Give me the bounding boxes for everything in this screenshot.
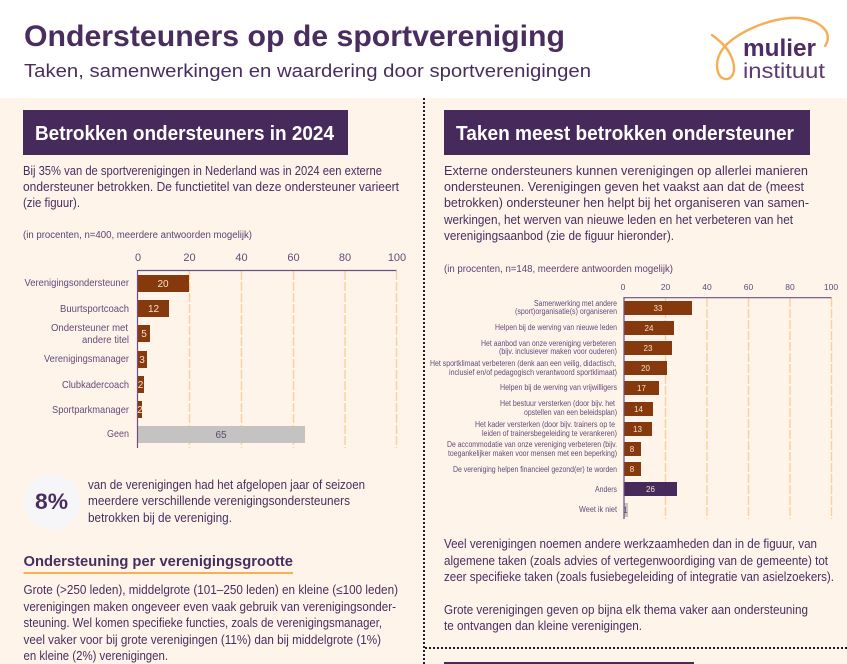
bar chart: taken (430, 282, 838, 519)
bar chart: taken: 0 (621, 282, 626, 292)
bar chart: taken: 24 (645, 324, 654, 333)
bar chart: functietitels (24, 252, 406, 448)
intro text: Bij 35% van de sportverenigingen in Nederland was in 2024 een externe (23, 164, 382, 178)
bar chart: taken: 33 (654, 304, 663, 313)
bar chart: functietitels: Verenigingsondersteuner (24, 277, 129, 289)
bar chart: functietitels: 3 (139, 355, 145, 366)
bar chart: taken: 1 (623, 506, 628, 515)
bar chart: taken: 8 (630, 465, 635, 474)
bar chart: functietitels: 40 (235, 252, 248, 264)
heading: betrokken ondersteuners (23, 110, 348, 155)
bar chart: functietitels: 100 (388, 252, 406, 264)
bar chart: taken: opstellen van een beleidsplan) (524, 408, 617, 417)
bar chart: functietitels: 2 (137, 405, 143, 416)
bar chart: taken: De vereniging helpen financieel gezond(er) te worden (453, 465, 617, 474)
bar chart: taken: Het bestuur versterken (door bijv. het (500, 399, 616, 408)
bar chart: functietitels: andere titel (82, 334, 129, 346)
chart caption: (in procenten, n=400, meerdere antwoorden mogelijk) (23, 230, 252, 241)
bar chart: taken: 8 (630, 445, 635, 454)
text block: grote verenigingen: Grote verenigingen geven op bijna elk thema vaker aan ondersteuning (444, 603, 808, 617)
bar chart: taken: Samenwerking met andere (534, 299, 617, 308)
bar chart: taken: 17 (637, 384, 646, 393)
bar chart: taken: 100 (824, 282, 838, 292)
text block: andere werkzaamheden (444, 537, 834, 584)
bar chart: functietitels: Buurtsportcoach (60, 303, 129, 315)
bar chart: taken: 26 (646, 485, 655, 494)
bar chart: functietitels: Verenigingsmanager (44, 353, 129, 365)
bar chart: taken: Helpen bij de werving van nieuwe leden (495, 323, 617, 332)
bar chart: functietitels: 65 (215, 430, 227, 441)
bar chart: taken: 20 (661, 282, 670, 292)
bar chart: taken: inclusief en/of pedagogisch verantwoord sportklimaat) (449, 368, 617, 377)
bar chart: taken: Het sportklimaat verbeteren (denk aan een veilig, didactisch, (430, 359, 616, 368)
heading: taken: Taken meest betrokken ondersteuner (456, 123, 794, 145)
bar chart: taken: (sport)organisatie(s) organiseren (515, 307, 617, 316)
text block: grote verenigingen (444, 603, 808, 633)
heading: taken (444, 110, 810, 155)
text block: verenigingsgrootte (24, 583, 398, 663)
bar chart: taken: 14 (634, 405, 643, 414)
text block: verenigingsgrootte: Grote (>250 leden), middelgrote (101–250 leden) en kleine (≤100 leden) (24, 583, 398, 597)
bar chart: functietitels: Ondersteuner met (51, 322, 128, 334)
intro text: ondersteuner betrokken. De functietitel van deze ondersteuner varieert (23, 180, 399, 194)
intro text: (zie figuur). (23, 196, 80, 210)
intro text: werkingen, het werven van nieuwe leden en het verbeteren van het (443, 213, 793, 227)
subtitle: Taken, samenwerkingen en waardering door sportverenigingen (24, 61, 591, 81)
intro text: verenigingsaanbod (zie de figuur hieronder). (444, 229, 674, 243)
logo: Mulier Instituut: mulier (743, 35, 816, 62)
heading: ondersteuning per verenigingsgrootte: Ondersteuning per verenigingsgrootte (24, 554, 293, 570)
bar chart: functietitels: 2 (138, 380, 144, 391)
intro text: betrokken) ondersteuner hen helpt bij het organiseren van samen- (444, 196, 809, 210)
callout: 8%: meerdere verschillende verenigingsondersteuners (88, 494, 350, 508)
intro text: ondersteunen. Verenigingen geven het vaakst aan dat de (meest (444, 180, 805, 194)
bar chart: taken: Het aanbod van onze vereniging verbeteren (481, 339, 616, 348)
panel: taken meest betrokken ondersteuner (430, 110, 838, 633)
bar chart: taken: leiden of trainersbegeleiding te verankeren) (482, 429, 617, 438)
intro text (443, 164, 809, 243)
next section banner (cut off) (444, 662, 694, 664)
callout: 8%: van de verenigingen had het afgelopen jaar of seizoen (88, 478, 365, 492)
bar chart: taken: 20 (641, 364, 650, 373)
text block: verenigingsgrootte: en kleine (2%) verenigingen. (24, 649, 168, 663)
callout: 8%: 8% (35, 489, 68, 514)
text block: grote verenigingen: te ontvangen dan kleine verenigingen. (444, 619, 642, 633)
bar chart: taken: 80 (785, 282, 795, 292)
title: Ondersteuners op de sportvereniging (24, 20, 565, 53)
text block: andere werkzaamheden: algemene taken (zoals advies of vertegenwoordiging van de gemeente) tot (444, 554, 828, 568)
heading: betrokken ondersteuners: Betrokken ondersteuners in 2024 (35, 123, 335, 145)
bar chart: taken: De accommodatie van onze vereniging verbeteren (bijv. (447, 440, 617, 449)
callout: 8% (24, 474, 365, 530)
bar chart: functietitels: 12 (148, 304, 159, 315)
bar chart: functietitels: 0 (135, 252, 141, 264)
text block: verenigingsgrootte: veel vaker voor bij grote verenigingen (11%) dan bij middelgrote (1%) (24, 633, 381, 647)
bar chart: functietitels: 80 (339, 252, 351, 264)
text block: verenigingsgrootte: verenigingen maken ongeveer even vaak gebruik van verenigingsonder- (24, 600, 396, 614)
callout: 8%: betrokken bij de vereniging. (88, 511, 232, 525)
bar chart: functietitels: Sportparkmanager (52, 404, 129, 416)
bar chart: taken: 13 (633, 425, 642, 434)
intro text: Externe ondersteuners kunnen verenigingen op allerlei manieren (444, 164, 808, 178)
logo: Mulier Instituut (712, 18, 828, 83)
bar chart: taken: Het kader versterken (door bijv. trainers op te (475, 420, 615, 429)
bar chart: taken: toegankelijker maken voor mensen met een beperking) (448, 449, 617, 458)
bar chart: functietitels: 60 (287, 252, 300, 264)
bar chart: taken: 60 (744, 282, 753, 292)
bar chart: functietitels: 20 (183, 252, 196, 264)
bar chart: taken: 40 (702, 282, 712, 292)
bar chart: functietitels: 5 (141, 329, 147, 340)
text block: andere werkzaamheden: Veel verenigingen noemen andere werkzaamheden dan in de figuur, van (444, 537, 817, 551)
bar chart: functietitels: Clubkadercoach (62, 379, 129, 391)
bar chart: functietitels: Geen (107, 428, 129, 440)
logo: Mulier Instituut: instituut (743, 60, 825, 83)
bar chart: taken: (bijv. inclusiever maken voor ouderen) (499, 347, 617, 356)
bar chart: taken: 23 (644, 344, 653, 353)
bar chart: taken: Anders (595, 485, 617, 494)
bar chart: taken: Weet ik niet (579, 505, 618, 514)
chart caption: (in procenten, n=148, meerdere antwoorden mogelijk) (444, 264, 673, 275)
bar chart: functietitels: 20 (157, 279, 169, 290)
bar chart: taken: Helpen bij de werving van vrijwilligers (500, 383, 617, 392)
panel: betrokken ondersteuners (23, 110, 406, 663)
text block: verenigingsgrootte: steuning. Wel komen specifieke functies, zoals de verenigingsmanager, (24, 616, 382, 630)
intro text (23, 164, 399, 210)
